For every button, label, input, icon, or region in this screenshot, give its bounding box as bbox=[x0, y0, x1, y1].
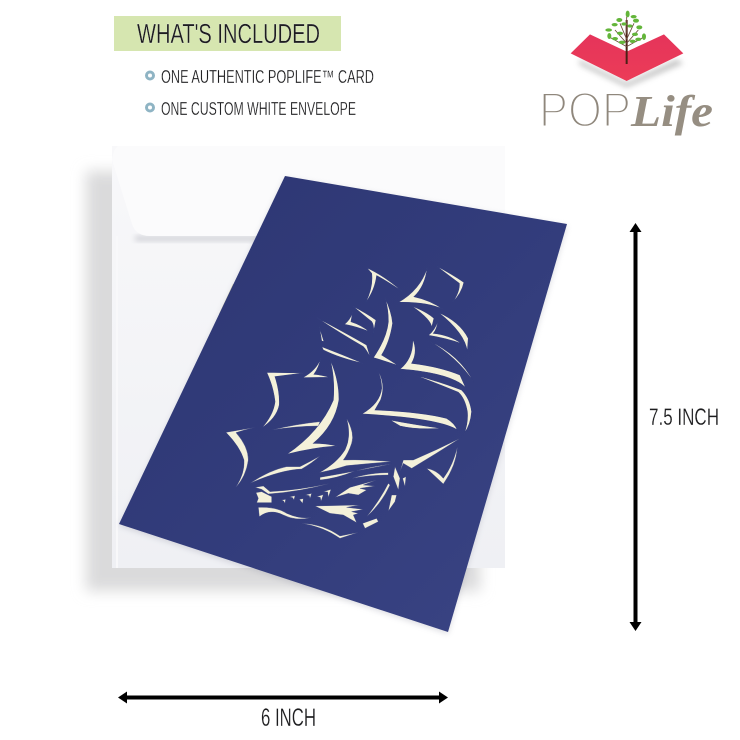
logo wordmark: Life: Life bbox=[630, 87, 713, 136]
heading: what's included: WHAT'S INCLUDED bbox=[137, 18, 320, 49]
sliver under card bbox=[219, 284, 235, 316]
logo: poplife bbox=[539, 11, 713, 137]
label: 6 inch: 6 INCH bbox=[261, 704, 316, 732]
list: included items: ONE AUTHENTIC POPLIFE™ CARD bbox=[161, 67, 374, 87]
heading: what's included bbox=[114, 16, 341, 51]
envelope flap bbox=[112, 146, 505, 241]
ship illustration: upper sails bbox=[261, 266, 474, 454]
arrow: width dimension bbox=[118, 692, 448, 704]
card: navy with ship cutout bbox=[119, 176, 567, 634]
arrow: height dimension bbox=[630, 223, 642, 631]
logo wordmark: POP: POP bbox=[539, 84, 631, 138]
icon: open book with tree bbox=[571, 11, 683, 87]
list: included items: ONE CUSTOM WHITE ENVELOPE bbox=[161, 99, 356, 119]
envelope with drop shadow bbox=[86, 146, 505, 591]
ship illustration: lower sails and hull bbox=[226, 418, 460, 538]
list: included items bbox=[146, 67, 374, 119]
